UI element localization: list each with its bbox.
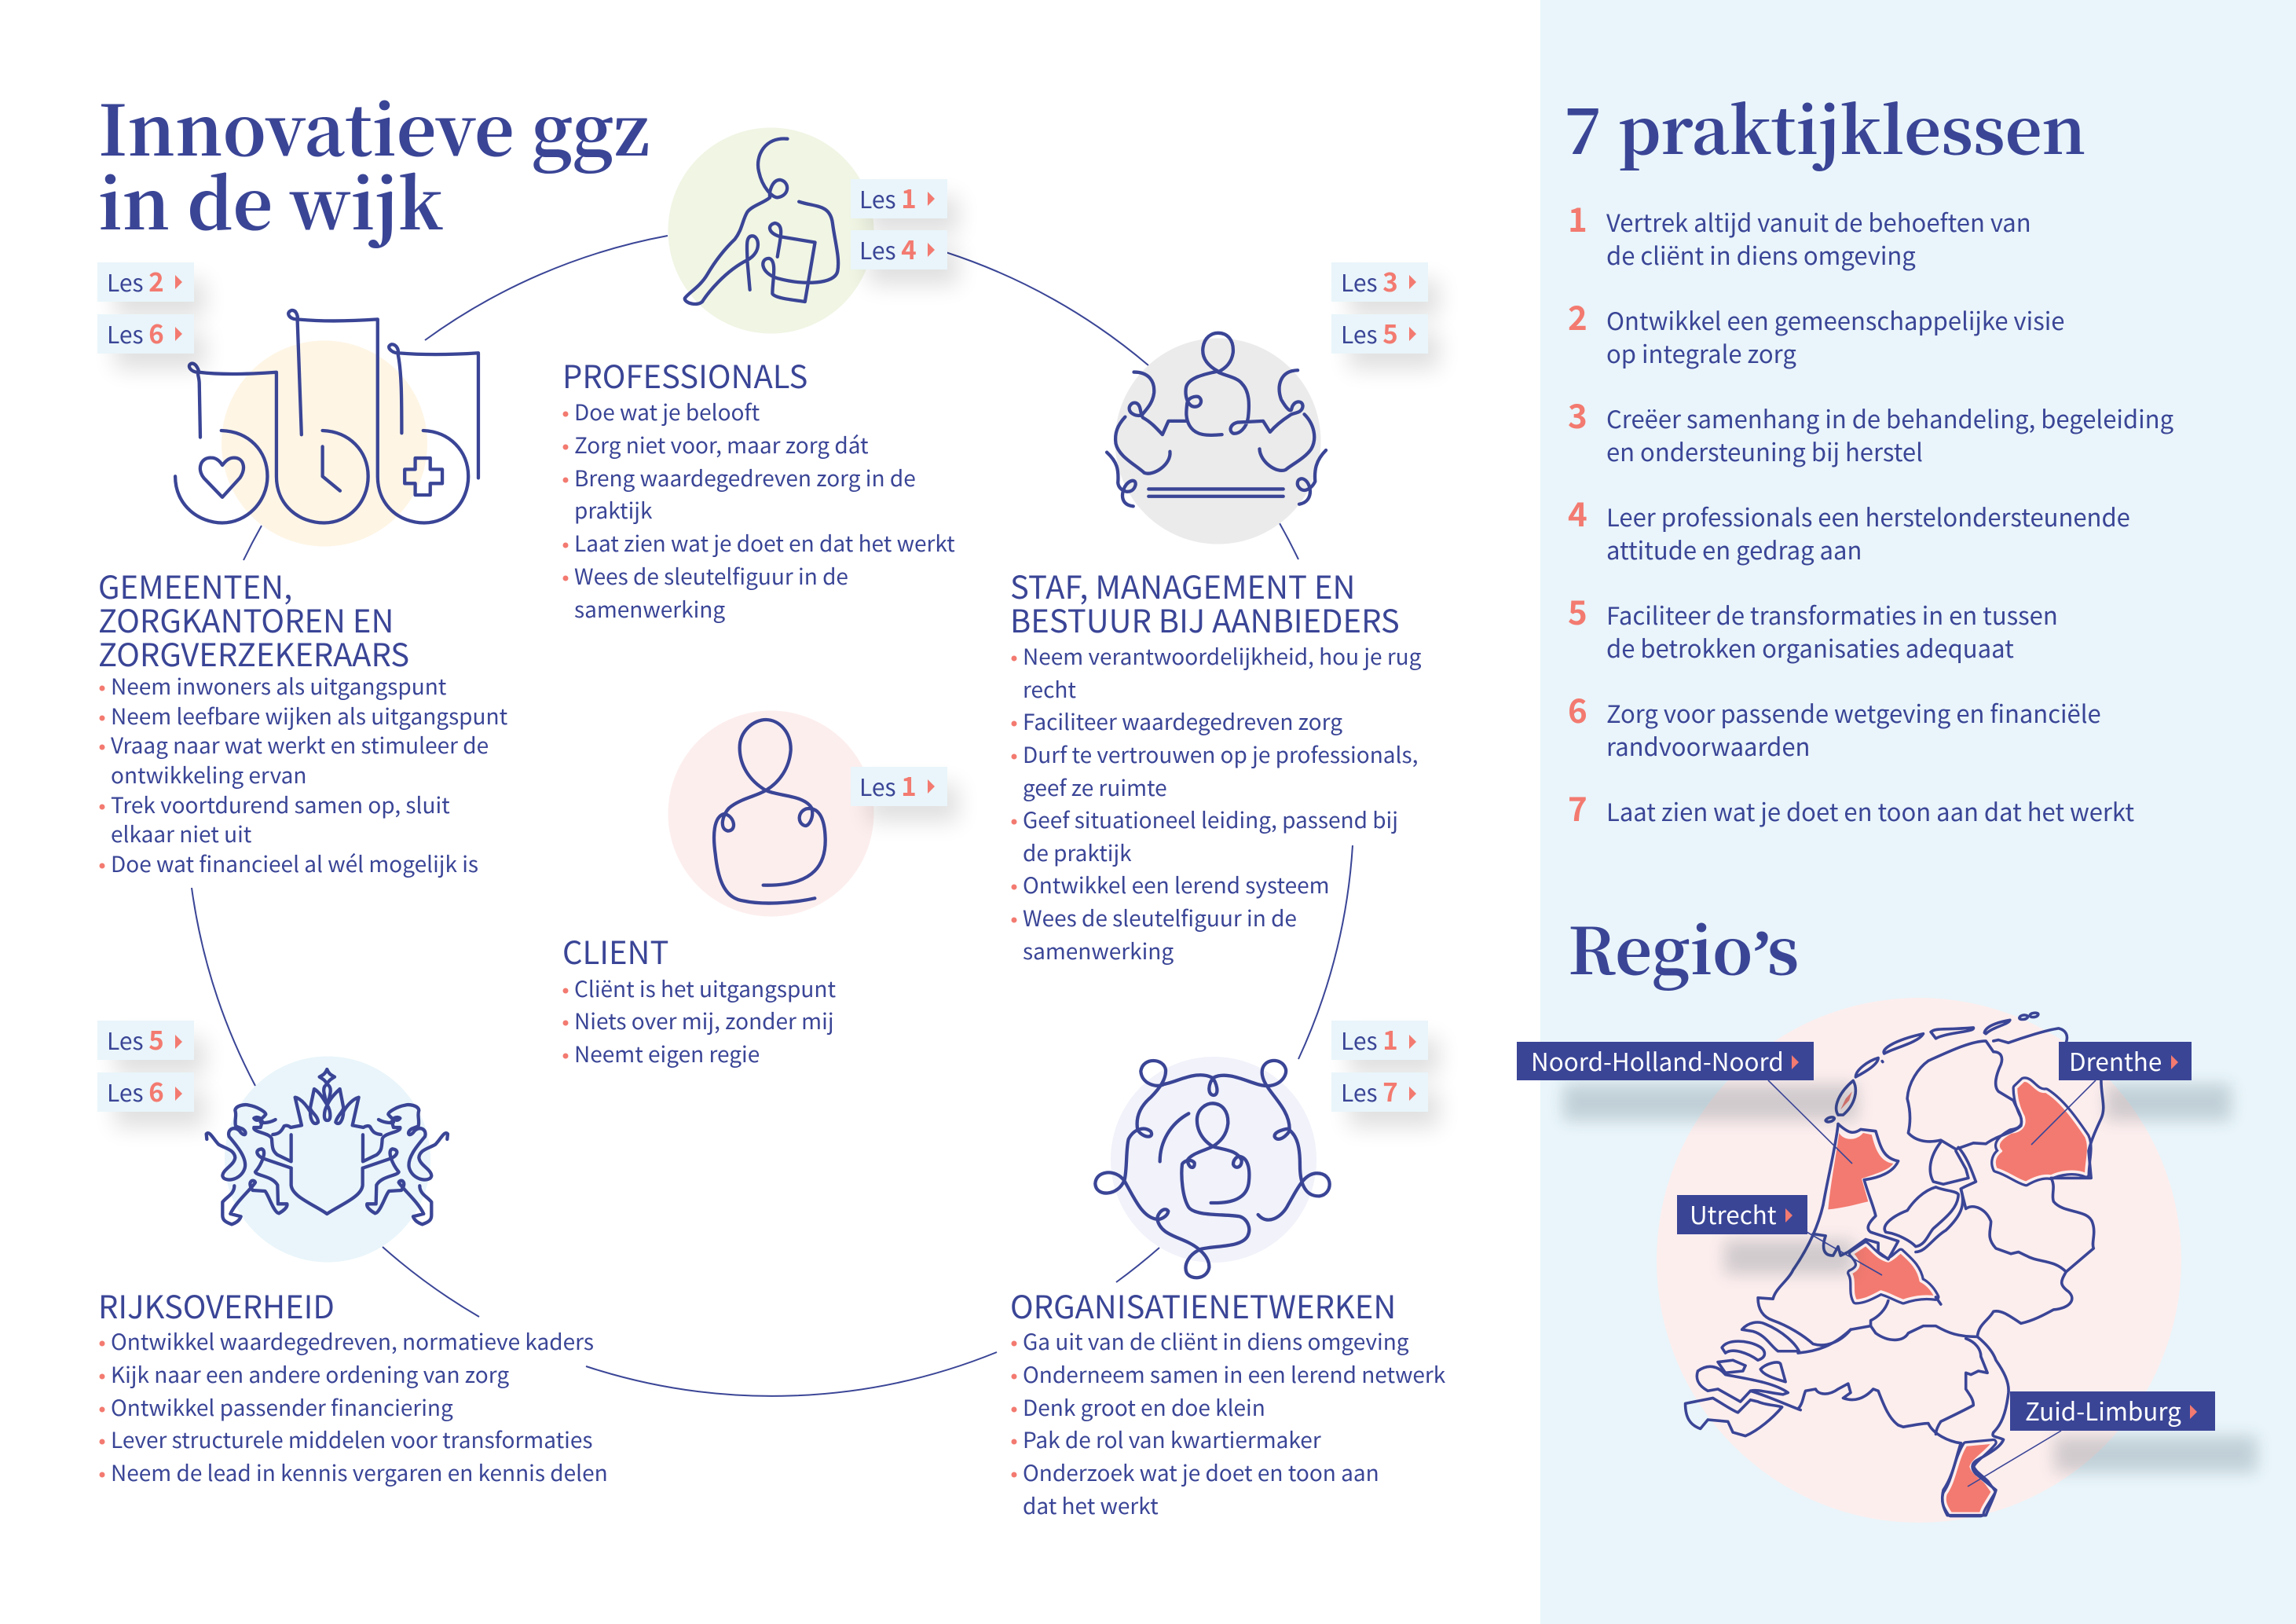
region: drenthe: [1994, 1080, 2089, 1182]
list: praktijklessen: 3: [1568, 390, 1587, 438]
label: Les 6 rijksoverheid: [97, 1072, 205, 1127]
region: noord-holland-noord: [1828, 1133, 1893, 1209]
list: praktijklessen: Zorg voor passende wetgeving en financiële: [1606, 695, 2101, 730]
map label: Utrecht: Utrecht: [1690, 1197, 1777, 1232]
text block: professionals: Zorg niet voor, maar zorg dát: [574, 429, 869, 460]
region: zuid-limburg: [1945, 1443, 1994, 1513]
list: praktijklessen: de betrokken organisaties adequaat: [1606, 629, 2014, 665]
text block: client: [562, 928, 836, 1069]
list: praktijklessen: Laat zien wat je doet en toon aan dat het werkt: [1606, 793, 2134, 828]
text block: organisatienetwerken: Onderneem samen in een lerend netwerk: [1023, 1358, 1446, 1390]
icon: professionals: [668, 127, 873, 333]
text block: gemeenten: Doe wat financieel al wél mogelijk is: [111, 848, 478, 879]
text block: professionals: Doe wat je belooft: [574, 396, 760, 427]
icon: rijksoverheid: [207, 1056, 448, 1262]
text block: organisatienetwerken: Onderzoek wat je doet en toon aan: [1023, 1457, 1379, 1488]
text block: rijksoverheid: Ontwikkel passender financiering: [111, 1391, 453, 1423]
title: in de wijk: [98, 150, 443, 250]
list: praktijklessen: de cliënt in diens omgeving: [1606, 236, 1916, 272]
text block: organisatienetwerken: ORGANISATIENETWERKEN: [1010, 1282, 1396, 1328]
text block: staf, management en bestuur: Durf te vertrouwen op je professionals,: [1023, 739, 1418, 770]
text block: organisatienetwerken: [1010, 1282, 1446, 1521]
list: praktijklessen: Vertrek altijd vanuit de behoeften van: [1606, 203, 2031, 239]
label: Les 5 rijksoverheid: Les 5: [107, 1020, 164, 1058]
text block: staf, management en bestuur: BESTUUR BIJ AANBIEDERS: [1010, 596, 1400, 642]
icon: client: [668, 710, 873, 916]
text block: staf, management en bestuur: de praktijk: [1023, 837, 1132, 868]
text block: professionals: Breng waardegedreven zorg in de: [574, 462, 916, 493]
map label: Utrecht: [1677, 1195, 1807, 1234]
label: Les 1 client: Les 1: [859, 766, 917, 804]
list: praktijklessen: 4: [1568, 489, 1587, 537]
label: Les 6 rijksoverheid: Les 6: [107, 1072, 164, 1109]
text block: rijksoverheid: Ontwikkel waardegedreven, normatieve kaders: [111, 1325, 594, 1357]
panel: right column background: [1540, 0, 2296, 1624]
leader lines: [1768, 1080, 2096, 1487]
label: Les 7 organisatienetwerken: Les 7: [1341, 1072, 1398, 1109]
text block: gemeenten: Vraag naar wat werkt en stimuleer de: [111, 729, 489, 761]
heading: 7 praktijklessen: 7 praktijklessen: [1564, 81, 2086, 173]
label: Les 1 client: [851, 766, 958, 822]
list: praktijklessen: en ondersteuning bij herstel: [1606, 433, 1923, 468]
text block: professionals: praktijk: [574, 494, 653, 526]
text block: gemeenten: Neem inwoners als uitgangspunt: [111, 670, 447, 702]
text block: gemeenten: ZORGKANTOREN EN: [98, 596, 394, 642]
text block: staf, management en bestuur: Faciliteer waardegedreven zorg: [1023, 706, 1342, 737]
text block: staf, management en bestuur: [1010, 563, 1422, 966]
text block: staf, management en bestuur: STAF, MANAGEMENT EN: [1010, 563, 1355, 608]
list: praktijklessen: 1: [1568, 194, 1587, 242]
text block: gemeenten: [98, 563, 508, 879]
text block: rijksoverheid: [98, 1282, 608, 1488]
label: Les 5 staf: Les 5: [1341, 313, 1398, 351]
text block: staf, management en bestuur: Ontwikkel een lerend systeem: [1023, 869, 1330, 900]
text block: gemeenten: Trek voortdurend samen op, sluit: [111, 789, 450, 820]
map label: Drenthe: Drenthe: [2069, 1043, 2162, 1079]
text block: gemeenten: elkaar niet uit: [111, 818, 252, 849]
text block: professionals: Wees de sleutelfiguur in de: [574, 560, 848, 592]
text block: rijksoverheid: RIJKSOVERHEID: [98, 1282, 335, 1328]
list: praktijklessen: 6: [1568, 685, 1587, 733]
heading: regio's: Regio’s: [1568, 901, 1799, 993]
map label: Zuid-Limburg: [2010, 1391, 2215, 1431]
icon: staf management bestuur: [1107, 333, 1326, 544]
icon: gemeenten: [175, 310, 478, 547]
outlines: provinces and coast: [1686, 1013, 2104, 1516]
text block: organisatienetwerken: Denk groot en doe klein: [1023, 1391, 1265, 1423]
label: Les 1 organisatienetwerken: Les 1: [1341, 1020, 1398, 1058]
text block: gemeenten: ZORGVERZEKERAARS: [98, 630, 409, 676]
list: praktijklessen: randvoorwaarden: [1606, 728, 1810, 763]
text block: staf, management en bestuur: Wees de sleutelfiguur in de: [1023, 902, 1297, 933]
list: praktijklessen: 7: [1568, 783, 1587, 831]
label: Les 2 gemeenten: [97, 262, 205, 317]
list: praktijklessen: op integrale zorg: [1606, 335, 1796, 370]
map label: Noord-Holland-Noord: Noord-Holland-Noord: [1531, 1043, 1784, 1079]
map label shadows: [1563, 1084, 2257, 1472]
text block: rijksoverheid: Lever structurele middelen voor transformaties: [111, 1424, 592, 1455]
label: Les 7 organisatienetwerken: [1331, 1072, 1439, 1127]
text block: professionals: samenwerking: [574, 593, 725, 625]
text block: gemeenten: Neem leefbare wijken als uitgangspunt: [111, 700, 508, 731]
text block: staf, management en bestuur: recht: [1023, 673, 1076, 705]
list: praktijklessen: attitude en gedrag aan: [1606, 531, 1862, 566]
list: praktijklessen: 5: [1568, 587, 1587, 635]
label: Les 5 rijksoverheid: [97, 1020, 205, 1076]
label: Les 2 gemeenten: Les 2: [107, 262, 164, 299]
text block: organisatienetwerken: dat het werkt: [1023, 1490, 1159, 1521]
text block: staf, management en bestuur: samenwerking: [1023, 935, 1174, 966]
connecting circle arcs: [192, 236, 1353, 1396]
list: praktijklessen: Creëer samenhang in de behandeling, begeleiding: [1606, 400, 2174, 435]
text block: professionals: [562, 352, 955, 625]
text block: rijksoverheid: Neem de lead in kennis vergaren en kennis delen: [111, 1457, 608, 1488]
text block: staf, management en bestuur: Neem verantwoordelijkheid, hou je rug: [1023, 640, 1422, 672]
label: Les 6 gemeenten: [97, 313, 205, 369]
label: Les 5 staf: [1331, 313, 1439, 369]
text block: client: CLIENT: [562, 928, 668, 973]
label: Les 1 professionals: Les 1: [859, 178, 917, 216]
text block: staf, management en bestuur: Geef situationeel leiding, passend bij: [1023, 804, 1398, 835]
title: Innovatieve ggz: [98, 76, 650, 176]
text block: organisatienetwerken: Pak de rol van kwartiermaker: [1023, 1424, 1321, 1455]
label: Les 3 staf: [1331, 262, 1439, 317]
label: Les 4 professionals: [851, 229, 958, 285]
label: Les 1 professionals: [851, 178, 958, 234]
text block: rijksoverheid: Kijk naar een andere ordening van zorg: [111, 1358, 509, 1390]
map label: Zuid-Limburg: Zuid-Limburg: [2025, 1393, 2181, 1428]
text block: professionals: PROFESSIONALS: [562, 352, 807, 398]
region: utrecht: [1851, 1245, 1935, 1300]
label: Les 6 gemeenten: Les 6: [107, 313, 164, 351]
text block: professionals: Laat zien wat je doet en dat het werkt: [574, 527, 955, 559]
list: praktijklessen: [1568, 194, 2174, 831]
map: nederland: [1657, 998, 2181, 1523]
text block: client: Cliënt is het uitgangspunt: [574, 973, 836, 1004]
text block: gemeenten: GEMEENTEN,: [98, 563, 292, 608]
text block: organisatienetwerken: Ga uit van de cliënt in diens omgeving: [1023, 1325, 1409, 1357]
text block: client: Niets over mij, zonder mij: [574, 1005, 834, 1036]
label: Les 1 organisatienetwerken: [1331, 1020, 1439, 1076]
label: Les 3 staf: Les 3: [1341, 262, 1398, 299]
list: praktijklessen: Faciliteer de transformaties in en tussen: [1606, 596, 2058, 632]
label: Les 4 professionals: Les 4: [859, 229, 917, 267]
text block: gemeenten: ontwikkeling ervan: [111, 759, 306, 790]
list: praktijklessen: Leer professionals een herstelondersteunende: [1606, 498, 2130, 533]
list: praktijklessen: Ontwikkel een gemeenschappelijke visie: [1606, 302, 2064, 337]
title: [98, 76, 650, 250]
list: praktijklessen: 2: [1568, 292, 1587, 340]
text block: client: Neemt eigen regie: [574, 1038, 760, 1069]
map label: Drenthe: [2059, 1042, 2192, 1080]
text block: staf, management en bestuur: geef ze ruimte: [1023, 772, 1167, 803]
icon: organisatienetwerken: [1095, 1057, 1330, 1278]
